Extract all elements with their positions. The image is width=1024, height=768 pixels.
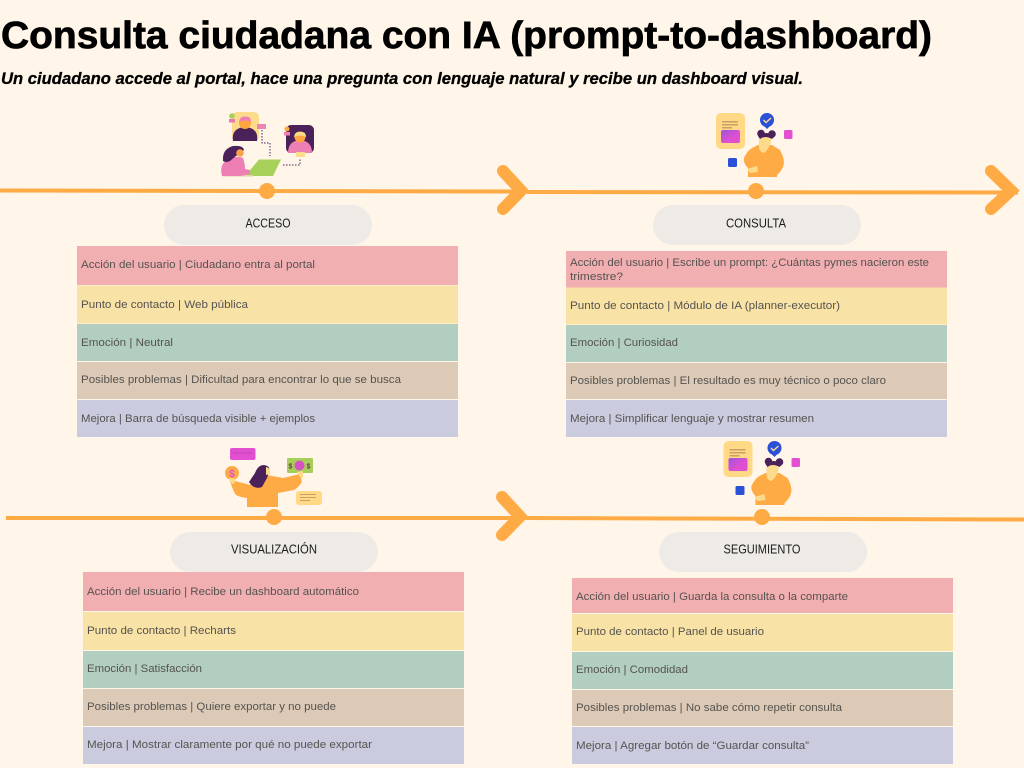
table: acceso: Acción del usuario | Ciudadano entra al portal xyxy=(81,259,315,271)
table: acceso xyxy=(77,246,458,437)
icon: woman holding coin and banknote: $ xyxy=(289,464,293,470)
table: seguimiento: Mejora | Agregar botón de “Guardar consulta” xyxy=(576,740,809,752)
heading: consulta xyxy=(653,205,861,245)
table: consulta: Punto de contacto | Módulo de IA (planner-executor) xyxy=(570,300,840,312)
table: consulta: Emoción | Curiosidad xyxy=(570,337,678,349)
panel: acceso xyxy=(77,205,458,437)
timeline: top row xyxy=(0,171,1018,209)
table: visualización: Posibles problemas | Quiere exportar y no puede xyxy=(87,701,336,713)
heading: acceso xyxy=(164,205,372,245)
table: acceso: Posibles problemas | Dificultad para encontrar lo que se busca xyxy=(81,374,402,386)
table: acceso: Mejora | Barra de búsqueda visible + ejemplos xyxy=(81,413,316,425)
table: consulta: Mejora | Simplificar lenguaje y mostrar resumen xyxy=(570,413,814,425)
subtitle: Un ciudadano accede al portal, hace una pregunta con lenguaje natural y recibe un dashboard visual. xyxy=(1,69,803,88)
table: seguimiento: Posibles problemas | No sabe cómo repetir consulta xyxy=(576,702,843,714)
table: seguimiento: Emoción | Comodidad xyxy=(576,664,688,676)
heading: acceso: ACCESO xyxy=(246,216,290,230)
heading: consulta: CONSULTA xyxy=(726,216,786,230)
icon: woman at laptop with chat contacts xyxy=(221,112,314,176)
heading: seguimiento: SEGUIMIENTO xyxy=(724,542,800,556)
table: seguimiento: Punto de contacto | Panel de usuario xyxy=(576,626,764,638)
table: consulta: Posibles problemas | El resultado es muy técnico o poco claro xyxy=(570,375,886,387)
icon: woman holding coin and banknote: $ xyxy=(307,464,311,470)
table: consulta xyxy=(566,251,947,437)
icon: woman holding coin and banknote xyxy=(225,448,322,507)
table: acceso: Punto de contacto | Web pública xyxy=(81,299,249,311)
table: visualización: Mejora | Mostrar claramente por qué no puede exportar xyxy=(87,739,372,751)
table: visualización: Emoción | Satisfacción xyxy=(87,663,202,675)
heading: seguimiento xyxy=(659,532,867,572)
panel: consulta xyxy=(566,205,947,437)
table: visualización: Punto de contacto | Recharts xyxy=(87,625,237,637)
panel: seguimiento xyxy=(572,532,953,764)
heading: visualización xyxy=(170,532,378,572)
table: seguimiento xyxy=(572,578,953,764)
icon: woman thinking, consulta xyxy=(716,113,792,177)
heading: visualización: VISUALIZACIÓN xyxy=(231,542,317,556)
timeline: bottom row xyxy=(6,497,1024,535)
table: visualización: Acción del usuario | Recibe un dashboard automático xyxy=(87,586,359,598)
panel: visualización xyxy=(83,532,464,764)
table: consulta: trimestre? xyxy=(570,271,623,283)
title: Consulta ciudadana con IA (prompt-to-dashboard) xyxy=(1,15,932,57)
icon: woman holding coin and banknote: $ xyxy=(229,469,235,480)
table: visualización xyxy=(83,572,464,764)
table: seguimiento: Acción del usuario | Guarda la consulta o la comparte xyxy=(576,591,848,603)
icon: woman thinking, seguimiento xyxy=(724,441,800,505)
table: acceso: Emoción | Neutral xyxy=(81,337,173,349)
table: consulta: Acción del usuario | Escribe un prompt: ¿Cuántas pymes nacieron este xyxy=(570,257,929,269)
